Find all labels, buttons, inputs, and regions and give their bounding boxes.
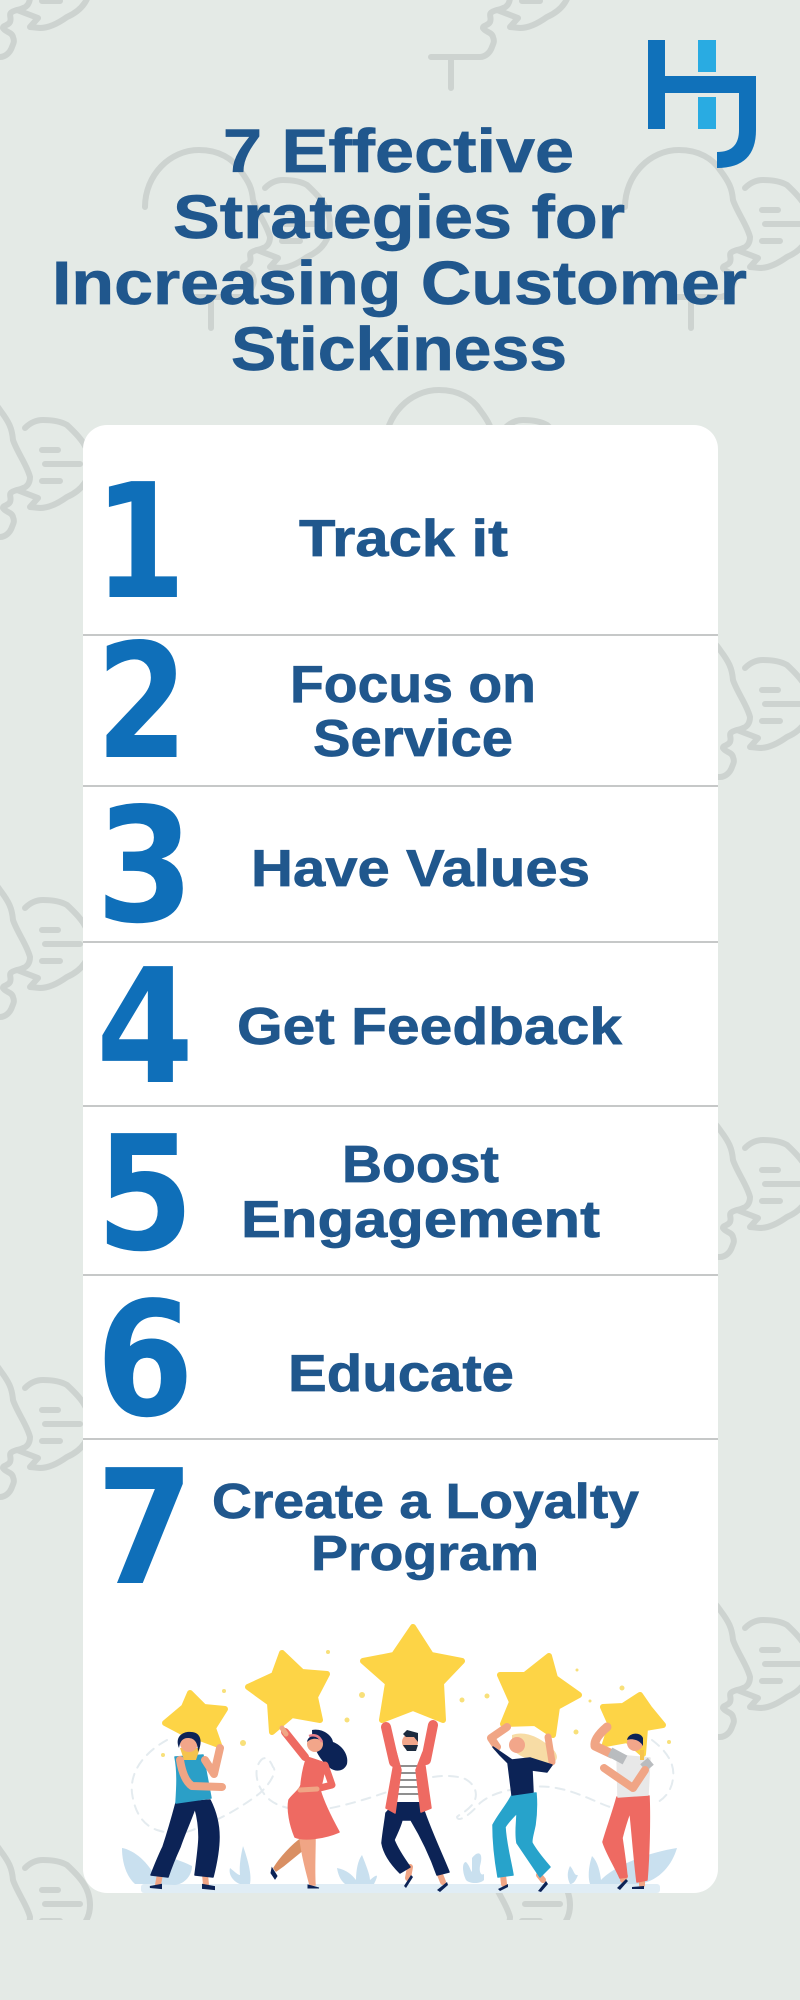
person 4: navy top (491, 1727, 557, 1892)
person 5: grey shirt (595, 1727, 650, 1890)
panel: strategies list (83, 425, 718, 1893)
strategy 2: Focus on (290, 656, 536, 714)
person 3: striped shirt (382, 1725, 449, 1892)
strategy 6: Educate (288, 1345, 514, 1403)
strategy 5: 5 (96, 1102, 194, 1287)
title (52, 117, 747, 383)
title: Stickiness (231, 315, 567, 383)
logo (648, 40, 756, 168)
star 4 (500, 1656, 579, 1735)
strategy 1: 1 (94, 450, 186, 635)
strategy 7 (96, 1436, 639, 1621)
strategy 4: Get Feedback (237, 998, 622, 1056)
strategy 6 (96, 1268, 514, 1453)
dashed path (132, 1740, 673, 1833)
strategy 3: 3 (96, 774, 194, 959)
strategy 7: Create a Loyalty (212, 1475, 639, 1529)
strategy 2: 2 (96, 610, 188, 795)
title: Strategies for (173, 183, 625, 251)
strategy 1 (94, 450, 508, 635)
strategy 4: 4 (96, 935, 194, 1120)
strategy 7: Program (311, 1527, 539, 1581)
star 1 (165, 1693, 225, 1745)
title: Increasing Customer (52, 249, 747, 317)
row dividers (83, 634, 718, 1440)
strategy 4 (96, 935, 622, 1120)
leaves (122, 1846, 677, 1885)
strategy 3: Have Values (251, 840, 590, 898)
person 2: coral dress (271, 1728, 347, 1888)
strategy 5: Boost (342, 1136, 499, 1194)
star 5 (603, 1695, 663, 1754)
strategy 6: 6 (96, 1268, 194, 1453)
strategy 7: 7 (96, 1436, 194, 1621)
title: 7 Effective (223, 117, 574, 185)
strategy 3 (96, 774, 590, 959)
ground (141, 1884, 660, 1893)
strategy 5: Engagement (241, 1191, 600, 1249)
star 2 (248, 1653, 327, 1732)
strategy 2: Service (313, 710, 513, 768)
illustration: people holding up stars (122, 1627, 677, 1893)
star 3 (363, 1627, 462, 1720)
strategy 1: Track it (299, 510, 508, 568)
person 1: teal top (150, 1732, 222, 1889)
strategy 2 (96, 610, 536, 795)
strategy 5 (96, 1102, 600, 1287)
yellow dots (161, 1650, 671, 1757)
